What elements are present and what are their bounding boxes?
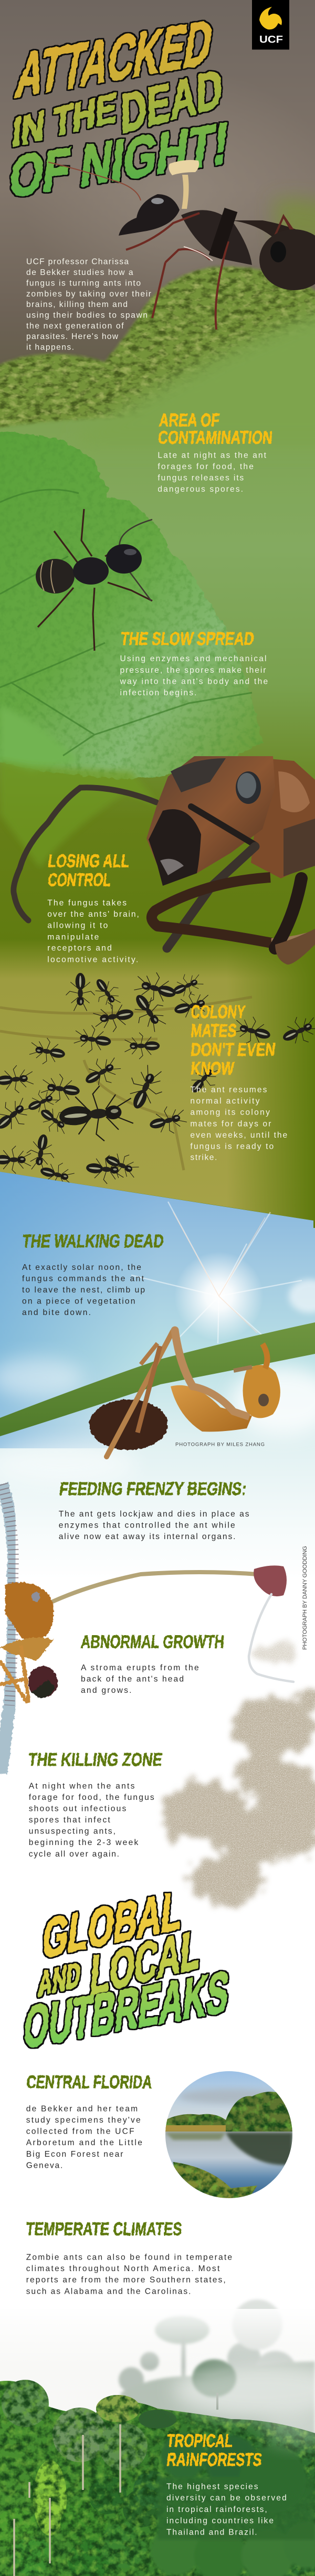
section: colony mates don't even know: COLONY: [190, 1002, 246, 1022]
section: losing all control: The fungus takes: [47, 898, 127, 908]
panel: contamination backdrop and olive field: [0, 378, 315, 1228]
section: losing all control: receptors and: [47, 944, 112, 953]
section: area of contamination: [157, 410, 274, 494]
section: temperate climates: TEMPERATE CLIMATES: [25, 2219, 183, 2239]
section: colony mates don't even know: fungus is ready to: [190, 1142, 274, 1151]
section: feeding frenzy begins: The ant gets lockjaw and dies in place as: [59, 1510, 249, 1519]
section: colony mates don't even know: even weeks, until the: [190, 1131, 287, 1140]
section: the killing zone: forage for food, the fungus: [29, 1793, 154, 1802]
section: the killing zone: cycle all over again.: [29, 1850, 119, 1859]
illustration: ant with fungus on moss: [48, 160, 315, 330]
section: temperate climates: [25, 2219, 232, 2296]
section: losing all control: allowing it to: [47, 921, 108, 930]
section: tropical rainforests: TROPICAL: [166, 2431, 234, 2451]
section: tropical rainforests: [166, 2431, 287, 2537]
section: the slow spread: Using enzymes and mechanical: [120, 654, 267, 663]
title: global and local outbreaks: GLOBAL: [40, 1879, 185, 1969]
panel: sky background: [0, 1172, 315, 1579]
section: abnormal growth: back of the ant's head: [81, 1675, 184, 1683]
title: global and local outbreaks: AND: [37, 1955, 82, 2003]
section: area of contamination: forages for food, the: [158, 462, 254, 471]
section: area of contamination: AREA OF: [158, 410, 220, 430]
section: the slow spread: way into the ant's body and the: [120, 677, 268, 686]
section: tropical rainforests: in tropical rainforests,: [166, 2505, 267, 2514]
section: the walking dead: and bite down.: [22, 1308, 91, 1317]
section: area of contamination: Late at night as the ant: [158, 451, 267, 460]
title: attacked in the dead of night: OF NIGHT!: [6, 110, 232, 210]
section: colony mates don't even know: normal activity: [190, 1097, 260, 1106]
section: temperate climates: reports are from the more Southern states,: [26, 2276, 226, 2285]
section: the walking dead: fungus commands the ant: [22, 1274, 144, 1283]
section: the killing zone: At night when the ants: [29, 1782, 135, 1790]
section: colony mates don't even know: mates for days or: [190, 1119, 271, 1128]
illustration: spore cloud: [164, 1642, 315, 1902]
logo: UCF: [252, 0, 289, 49]
illustration: misty rainforest: [0, 2299, 315, 2576]
text block: intro: de Bekker studies how a: [26, 268, 133, 277]
section: the killing zone: shoots out infectious: [29, 1804, 127, 1813]
text block: intro: using their bodies to spawn: [26, 311, 148, 320]
section: feeding frenzy begins: [58, 1479, 249, 1541]
section: central florida: collected from the UCF: [26, 2127, 134, 2136]
section: the walking dead: on a piece of vegetation: [22, 1297, 135, 1306]
illustration: leaf: [0, 432, 263, 868]
text block: intro: it happens.: [26, 343, 74, 352]
section: the walking dead: [21, 1231, 165, 1317]
section: central florida: study specimens they've: [26, 2116, 141, 2125]
section: feeding frenzy begins: FEEDING FRENZY BEGINS:: [58, 1479, 248, 1499]
section: abnormal growth: A stroma erupts from the: [81, 1663, 199, 1672]
section: area of contamination: CONTAMINATION: [157, 428, 274, 448]
section: tropical rainforests: including countries like: [166, 2517, 274, 2526]
section: the slow spread: THE SLOW SPREAD: [120, 629, 255, 649]
illustration: sun with rays: [131, 1202, 302, 1343]
text block: intro: UCF professor Charissa: [26, 258, 129, 267]
illustration: giant ant head: [14, 756, 315, 964]
text block: intro: parasites. Here's how: [26, 332, 119, 341]
title: global and local outbreaks: LOCAL: [88, 1917, 202, 2006]
text block: intro: zombies by taking over their: [26, 290, 151, 299]
section: area of contamination: fungus releases its: [158, 474, 244, 483]
section: temperate climates: such as Alabama and the Carolinas.: [26, 2287, 191, 2296]
section: the killing zone: beginning the 2-3 week: [29, 1838, 139, 1847]
section: the slow spread: infection begins.: [120, 688, 196, 697]
section: the killing zone: [27, 1750, 163, 1859]
text block: intro: [26, 258, 151, 352]
section: the slow spread: [120, 629, 268, 697]
moss covered ground: [0, 198, 315, 446]
panel: intro background: [0, 0, 315, 420]
section: colony mates don't even know: KNOW: [190, 1058, 235, 1079]
text block: intro: fungus is turning ants into: [26, 279, 141, 288]
section: central florida: Big Econ Forest near: [26, 2150, 123, 2159]
section: losing all control: manipulate: [47, 932, 99, 941]
section: the killing zone: THE KILLING ZONE: [27, 1750, 163, 1770]
section: colony mates don't even know: [190, 1002, 287, 1162]
text block: intro: the next generation of: [26, 322, 124, 331]
section: the walking dead: At exactly solar noon, the: [22, 1263, 141, 1272]
section: feeding frenzy begins: enzymes that controlled the ant while: [59, 1521, 235, 1530]
photo credit: Miles Zhang: PHOTOGRAPH BY MILES ZHANG: [175, 1442, 265, 1448]
photo credit: Danny Goodding: PHOTOGRAPH BY DANNY GOODDING: [302, 1546, 308, 1650]
title: attacked in the dead of night: [6, 7, 232, 210]
illustration: black ant on leaf: [36, 509, 152, 651]
title: attacked in the dead of night: IN THE: [11, 84, 119, 156]
section: abnormal growth: ABNORMAL GROWTH: [80, 1632, 225, 1652]
section: the killing zone: spores that infect: [29, 1816, 110, 1825]
section: colony mates don't even know: MATES: [190, 1021, 238, 1041]
title: global and local outbreaks: [20, 1879, 232, 2060]
section: the walking dead: to leave the nest, climb up: [22, 1286, 145, 1295]
section: temperate climates: climates throughout North America. Most: [26, 2264, 220, 2273]
section: abnormal growth: [80, 1632, 225, 1695]
section: losing all control: [47, 851, 139, 964]
section: losing all control: LOSING ALL: [47, 851, 131, 872]
section: the killing zone: unsuspecting ants,: [29, 1827, 116, 1836]
section: tropical rainforests: RAINFORESTS: [166, 2450, 263, 2470]
section: central florida: Arboretum and the Little: [26, 2138, 142, 2147]
section: tropical rainforests: The highest species: [166, 2482, 258, 2492]
section: colony mates don't even know: strike.: [190, 1153, 217, 1162]
section: central florida: [26, 2072, 153, 2170]
section: abnormal growth: and grows.: [81, 1686, 131, 1695]
illustration: ant colony on yellow surface: [0, 939, 315, 1221]
section: losing all control: over the ants' brain,: [47, 910, 139, 919]
photo: circular lake: [165, 2071, 292, 2201]
section: temperate climates: Zombie ants can also be found in temperate: [26, 2253, 232, 2262]
illustration: ant with fungal stalk on twig: [0, 1484, 293, 1774]
section: central florida: Geneva.: [26, 2161, 62, 2170]
section: the walking dead: THE WALKING DEAD: [21, 1231, 165, 1252]
section: tropical rainforests: Thailand and Brazil.: [166, 2528, 257, 2537]
section: colony mates don't even know: among its colony: [190, 1108, 270, 1117]
text block: intro: brains, killing them and: [26, 300, 128, 309]
section: central florida: de Bekker and her team: [26, 2104, 138, 2113]
section: tropical rainforests: diversity can be observed: [166, 2494, 287, 2503]
title: attacked in the dead of night: DEAD: [121, 57, 222, 145]
section: losing all control: CONTROL: [47, 870, 112, 890]
section: area of contamination: dangerous spores.: [158, 485, 243, 494]
section: feeding frenzy begins: alive now eat away its internal organs.: [59, 1532, 235, 1541]
section: colony mates don't even know: DON'T EVEN: [190, 1040, 277, 1060]
illustration: dead ant biting grass stem: [0, 1322, 315, 1457]
logo: UCF: UCF: [259, 35, 283, 45]
section: the slow spread: pressure, the spores make their: [120, 666, 266, 675]
section: central florida: CENTRAL FLORIDA: [26, 2072, 153, 2092]
section: losing all control: locomotive activity.: [47, 956, 138, 964]
section: colony mates don't even know: The ant resumes: [190, 1086, 267, 1095]
